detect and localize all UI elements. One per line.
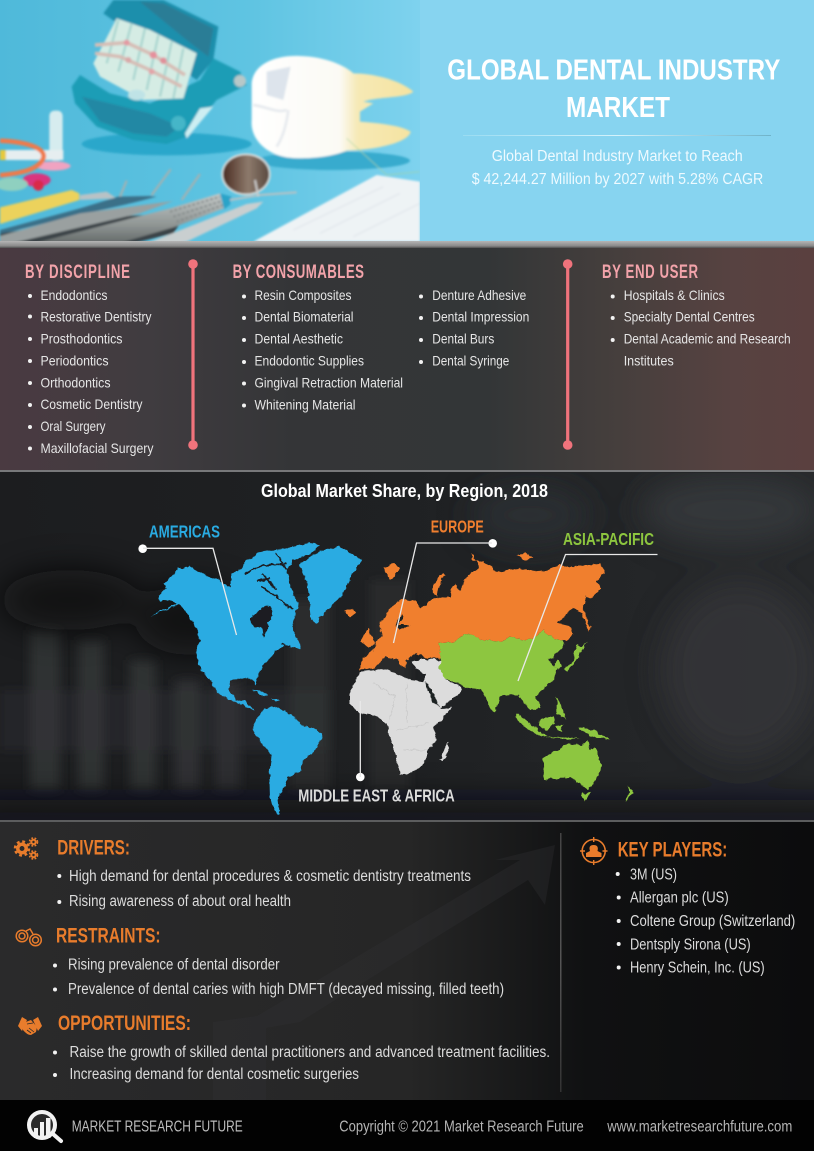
subtitle: Global Dental Industry Market to Reach: [492, 148, 743, 165]
segment: by consumables: Dental Aesthetic: [254, 330, 343, 346]
section: key players: Allergan plc (US): [630, 890, 729, 907]
section: drivers: Rising awareness of about oral health: [69, 893, 291, 910]
section: key players: KEY PLAYERS:: [618, 839, 727, 862]
segment: by consumables: Dental Biomaterial: [254, 309, 354, 325]
segment: by discipline: Restorative Dentistry: [40, 309, 152, 325]
segment: by discipline: Prosthodontics: [40, 330, 122, 346]
section: opportunities: [18, 1012, 550, 1083]
section: opportunities: Raise the growth of skilled dental practitioners and advanced treatment facilities.: [70, 1044, 550, 1061]
panel: hero photo of dental tools: [0, 0, 420, 248]
section: restraints: Rising prevalence of dental disorder: [68, 956, 280, 973]
segment: by discipline: Endodontics: [40, 287, 108, 303]
map: asia-pacific: [438, 629, 634, 802]
icon: market research future logo: [29, 1112, 61, 1141]
divider: discipline and consumables: [188, 259, 198, 450]
segment: by consumables: Dental Syringe: [432, 352, 509, 368]
segment: by end user: Hospitals & Clinics: [624, 287, 725, 303]
segment: by end user: Institutes: [624, 352, 674, 368]
map: middle east and africa: [350, 659, 462, 775]
map: europe and russia: [344, 553, 605, 669]
section: key players: Henry Schein, Inc. (US): [630, 960, 765, 977]
callout: middle east and africa: MIDDLE EAST & AFRICA: [298, 786, 455, 806]
panel: regional market share map: [0, 472, 814, 840]
callout: asia-pacific: [518, 529, 658, 681]
panel: market dynamics: [0, 822, 814, 1100]
segment: by consumables: Gingival Retraction Material: [254, 374, 403, 390]
icon: gears: [15, 838, 38, 859]
segment: by discipline: Oral Surgery: [40, 418, 106, 434]
section: drivers: High demand for dental procedures & cosmetic dentistry treatments: [69, 868, 471, 885]
section: key players: [580, 837, 795, 977]
section: drivers: [15, 836, 471, 910]
title: [447, 54, 780, 124]
panel: market segments: [0, 248, 814, 470]
callout: middle east and africa: [298, 701, 455, 806]
icon: handshake: [18, 1017, 42, 1035]
section: drivers: DRIVERS:: [57, 836, 130, 859]
segment: by discipline: BY DISCIPLINE: [25, 260, 130, 282]
heading: market share: Global Market Share, by Region, 2018: [261, 481, 548, 501]
segment: by consumables: [233, 260, 529, 412]
footer: Copyright © 2021 Market Research Future: [339, 1119, 584, 1136]
segment: by end user: [602, 260, 791, 368]
title: MARKET: [566, 92, 671, 124]
segment: by consumables: Endodontic Supplies: [254, 352, 364, 368]
segment: by end user: Specialty Dental Centres: [624, 309, 755, 325]
section: opportunities: OPPORTUNITIES:: [58, 1012, 191, 1035]
segment: by discipline: Maxillofacial Surgery: [40, 440, 154, 456]
subtitle: $ 42,244.27 Million by 2027 with 5.28% CAGR: [472, 171, 763, 188]
segment: by discipline: Periodontics: [40, 352, 108, 368]
segment: by end user: BY END USER: [602, 260, 698, 282]
section: opportunities: Increasing demand for dental cosmetic surgeries: [70, 1066, 359, 1083]
segment: by consumables: Dental Burs: [432, 330, 494, 346]
callout: asia-pacific: ASIA-PACIFIC: [563, 529, 654, 549]
segment: by discipline: Orthodontics: [40, 374, 110, 390]
callout: europe: [394, 517, 497, 643]
section: restraints: Prevalence of dental caries with high DMFT (decayed missing, filled teeth): [68, 981, 504, 998]
segment: by consumables: BY CONSUMABLES: [233, 260, 364, 282]
panel: title block: [420, 0, 814, 242]
divider: consumables and end user: [563, 259, 572, 450]
section: key players: Dentsply Sirona (US): [630, 936, 751, 953]
segment: by consumables: Denture Adhesive: [432, 287, 526, 303]
footer: MARKET RESEARCH FUTURE: [72, 1118, 243, 1135]
segment: by discipline: Cosmetic Dentistry: [40, 396, 142, 412]
section: key players: 3M (US): [630, 866, 677, 883]
segment: by consumables: Dental Impression: [432, 309, 529, 325]
segment: by end user: Dental Academic and Research: [624, 330, 791, 346]
section: restraints: [16, 924, 504, 998]
segment: by consumables: Whitening Material: [254, 396, 356, 412]
callout: americas: [138, 522, 236, 635]
callout: europe: EUROPE: [431, 517, 484, 537]
segment: by discipline: [25, 260, 154, 456]
section: restraints: RESTRAINTS:: [56, 924, 161, 947]
callout: americas: AMERICAS: [149, 522, 220, 542]
segment: by consumables: Resin Composites: [254, 287, 352, 303]
icon: key players target: [580, 837, 608, 865]
icon: handcuffs: [16, 929, 41, 946]
subtitle: [472, 148, 763, 188]
footer: [0, 1100, 814, 1151]
map: americas: [150, 543, 362, 813]
